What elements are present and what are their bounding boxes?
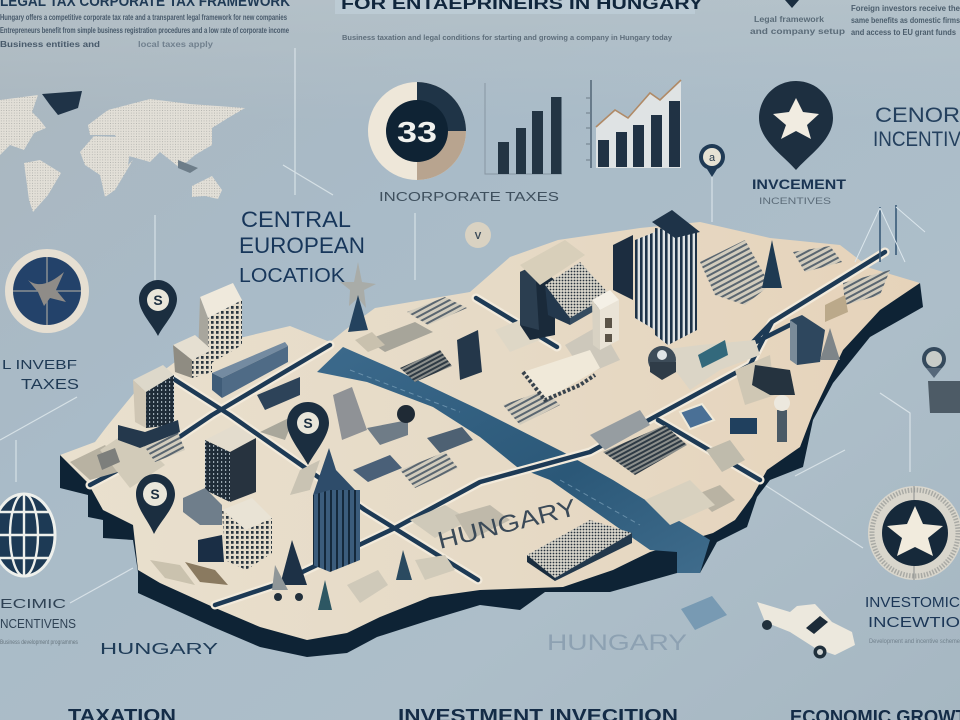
pin: map location top [465, 222, 491, 248]
small caption: and company setup [750, 27, 845, 36]
building: left tower [118, 365, 180, 448]
building: blue skyscraper [313, 448, 360, 572]
South America [24, 160, 61, 212]
label: central european location: LOCATIOK [239, 265, 346, 287]
icon: right pin with block [922, 347, 960, 413]
Greenland [42, 91, 82, 115]
label: investment incentives right: INCEWTIO [868, 614, 960, 631]
building: right blue tower [790, 315, 825, 365]
header text block: right [750, 0, 960, 37]
building: striped hall [523, 350, 600, 400]
building: teal glass block [698, 340, 728, 368]
pin: map location left lower [136, 474, 175, 534]
pin: map location top: V [475, 231, 482, 242]
map: district details [70, 240, 890, 603]
icon: small pin [699, 144, 725, 177]
map: river Danube [317, 347, 710, 573]
label: invest taxes: TAXES [21, 376, 79, 393]
right body lines: Foreign investors receive the [851, 4, 960, 13]
label: central incentives [873, 104, 960, 151]
Southeast Asia [178, 160, 198, 173]
Eurasia [88, 99, 245, 168]
building: domed tower [648, 346, 676, 380]
header text block: left [0, 0, 290, 49]
pin: map location centre: S [303, 415, 313, 431]
vintage car [757, 602, 855, 658]
building: cream tower lower [222, 498, 272, 570]
right body lines [851, 4, 960, 37]
map: river ripples [350, 370, 640, 525]
building: small dark shop [198, 535, 224, 562]
pin tip [785, 0, 799, 8]
pin: map location left upper [139, 280, 177, 336]
map: dark base [60, 283, 923, 657]
label: investment incentives: INVCEMENT [752, 176, 847, 192]
pin: map location left upper: S [153, 292, 163, 308]
building: dark twin tower [613, 235, 633, 300]
left body lines: Business entities and [0, 40, 100, 49]
building: pointed spires [272, 540, 412, 610]
building: cream block right [825, 295, 848, 322]
label: central european location: EUROPEAN [239, 233, 365, 258]
left body lines [0, 13, 289, 49]
label: economic incentives: ECIMIC [0, 596, 66, 611]
building: grey block [183, 488, 222, 525]
building: cream tower upper left [198, 283, 242, 365]
label: central european location: CENTRAL [241, 207, 351, 232]
area and bar chart: growth [586, 80, 681, 168]
building: dotted hall on Hungary block [527, 520, 632, 581]
donut chart: 33 [368, 82, 466, 180]
building: main skyscraper [635, 210, 700, 345]
donut value: 33 [397, 117, 437, 149]
building: low cream hall [520, 240, 585, 285]
bar chart: corporate taxes [485, 83, 562, 174]
Australia [192, 176, 222, 199]
icon: small pin: a [709, 152, 716, 164]
building: grey cone right [820, 328, 840, 360]
map of Hungary [60, 205, 925, 657]
left body lines: Hungary offers a competitive corporate tax rate and a transparent legal framework for new companies [0, 13, 287, 22]
building: long blue block [212, 342, 288, 398]
small caption [750, 15, 845, 36]
left body lines: local taxes apply [138, 40, 214, 49]
blue sticker decor [681, 596, 727, 630]
label: invest taxes [2, 357, 79, 393]
map lettering: HUNGARY: HUNGARY [435, 494, 579, 555]
left body lines: Entrepreneurs benefit from simple business registration procedures and a low rate of corporate income [0, 26, 289, 35]
building: white block [592, 290, 619, 350]
label: investment incentives right [865, 594, 960, 645]
Africa [80, 136, 133, 197]
label: investment incentives: INCENTIVES [759, 196, 831, 206]
label: central european location [239, 207, 365, 287]
building: dark cluster [752, 365, 795, 395]
North America [0, 95, 46, 155]
label: Hungary faded: HUNGARY [547, 630, 687, 655]
label: central incentives: CENOR [875, 104, 960, 127]
building: spire upper right [762, 240, 782, 288]
icon: compass badge [5, 249, 89, 333]
label: economic incentives: NCENTIVENS [0, 616, 76, 631]
map: land surface [60, 222, 920, 640]
building: dark tower [205, 425, 256, 502]
label: economic incentives [0, 596, 78, 646]
label: Hungary left: HUNGARY [100, 641, 218, 658]
label: investment incentives right: INVESTOMIC [865, 594, 960, 611]
callout lines [0, 48, 910, 603]
building: marker tower [774, 395, 790, 442]
globe icon [0, 494, 55, 576]
label: invest taxes: L INVEBF [2, 357, 77, 372]
label: economic incentives: Business development programmes [0, 640, 78, 646]
building: dotted roof hall [545, 262, 610, 325]
small caption: Legal framework [754, 15, 825, 24]
building: central dark tower [520, 265, 555, 340]
main title [335, 0, 703, 42]
pin: map location left lower: S [150, 486, 160, 502]
icon: star pin [759, 81, 833, 170]
building: low cream block [173, 335, 212, 378]
label: investment incentives [752, 176, 847, 206]
bridge [855, 205, 925, 262]
world map [0, 91, 245, 212]
building: blue windows block [730, 418, 757, 434]
map: roads [90, 252, 885, 605]
chart caption: corporate taxes: INCORPORATE TAXES [379, 189, 559, 204]
pin: map location centre [287, 402, 329, 465]
subtitle: Business taxation and legal conditions for starting and growing a company in Hungary today [342, 35, 672, 42]
badge: star medallion [868, 486, 960, 580]
monument: star and dark spire [340, 262, 376, 332]
